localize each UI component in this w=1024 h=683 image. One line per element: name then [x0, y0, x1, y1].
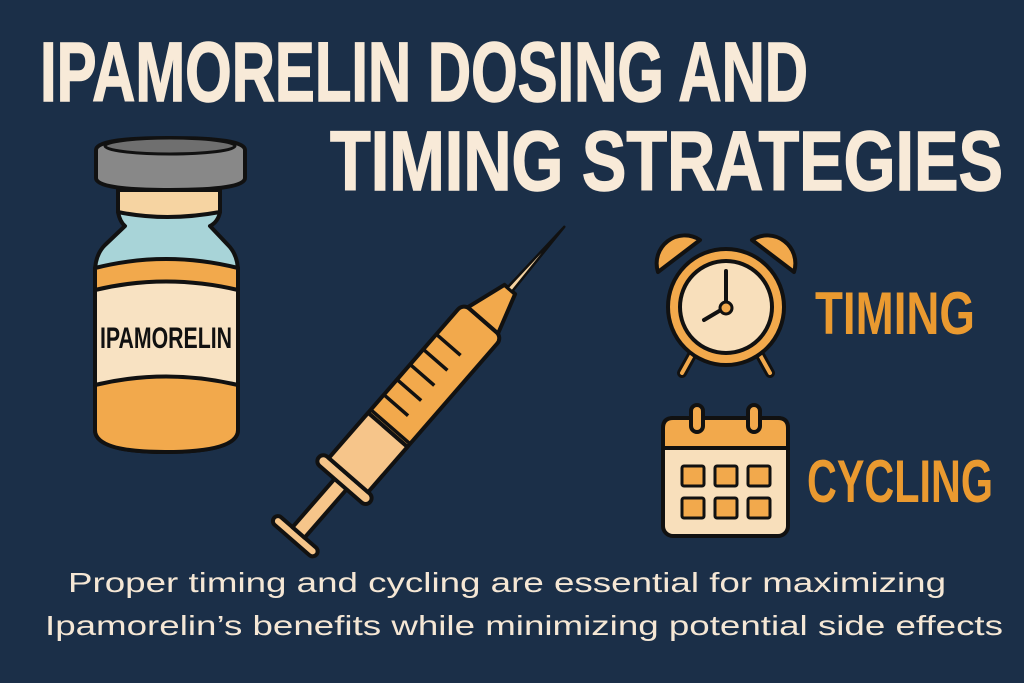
caption: Proper timing and cycling are essential for maximizing: [68, 567, 946, 598]
caption: [45, 567, 1003, 641]
icon: vial: [95, 138, 245, 452]
caption: Ipamorelin’s benefits while minimizing potential side effects: [45, 610, 1003, 641]
icon: alarm clock: [657, 235, 795, 373]
icon: calendar: [663, 405, 788, 536]
title: [40, 25, 1003, 208]
vial label text: IPAMORELIN: [100, 322, 232, 355]
label: timing: TIMING: [815, 280, 975, 347]
icon: syringe: [266, 204, 590, 562]
